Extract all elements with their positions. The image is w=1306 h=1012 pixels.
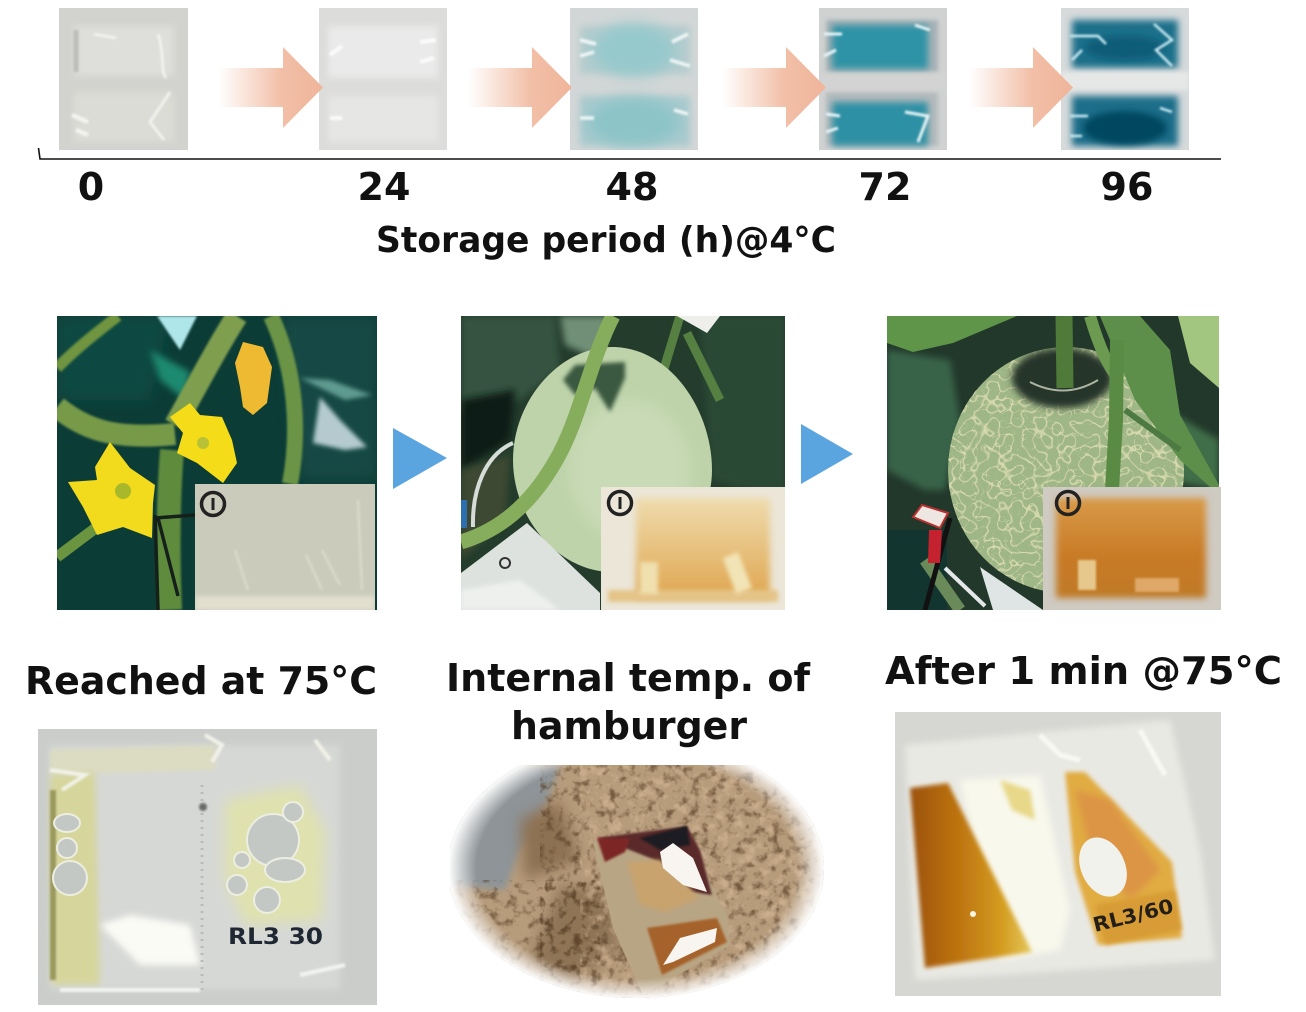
arrow: flowering to young fruit (393, 428, 447, 489)
heading: internal temperature of hamburger: Internal temp. of (446, 656, 810, 700)
heading: after 1 min at 75°C: After 1 min @75°C (885, 649, 1282, 693)
heading: internal temperature of hamburger (446, 656, 810, 748)
photo: pouch at 75°C, unchanged (38, 729, 377, 1005)
pouch at 24 h (319, 8, 447, 150)
arrow 0 to 24 h (218, 47, 323, 128)
axis tick labels: 0 (78, 165, 104, 209)
pouch at 48 h (570, 8, 698, 150)
arrow 48 to 72 h (722, 47, 826, 128)
axis tick labels: 24 (358, 165, 410, 209)
heading: internal temperature of hamburger: hamburger (511, 704, 747, 748)
indicator inset (195, 484, 375, 610)
axis title: Storage period (h)@4°C (376, 220, 836, 261)
photo: young melon with indicator (461, 316, 785, 610)
heading: reached at 75°C: Reached at 75°C (25, 659, 377, 703)
indicator pouch in patty (593, 825, 730, 995)
axis tick labels: 72 (859, 165, 911, 209)
pouch at 72 h (819, 8, 947, 150)
handwritten pouch mark: RL3 30 (228, 925, 323, 950)
pouch at 0 h (59, 8, 188, 150)
photo: netted melon with indicator (887, 316, 1221, 610)
photo: melon flowering with indicator (57, 316, 377, 610)
axis tick labels: 48 (606, 165, 658, 209)
arrow: young fruit to netted fruit (801, 424, 853, 484)
axis tick labels: 96 (1101, 165, 1153, 209)
handwritten pouch mark: RL3/60 (1090, 894, 1176, 937)
arrow 24 to 48 h (468, 47, 572, 128)
axis tick labels (78, 165, 1153, 209)
time axis (38, 148, 1221, 159)
pouch at 96 h (1061, 8, 1189, 150)
panel: storage period timeline (38, 8, 1221, 261)
indicator inset (1043, 487, 1221, 610)
indicator inset (601, 487, 785, 610)
photo: pouch after 1 min at 75°C, turned amber (895, 712, 1221, 996)
arrow 72 to 96 h (969, 47, 1073, 128)
photo: hamburger cross-section with pouch (450, 765, 824, 998)
